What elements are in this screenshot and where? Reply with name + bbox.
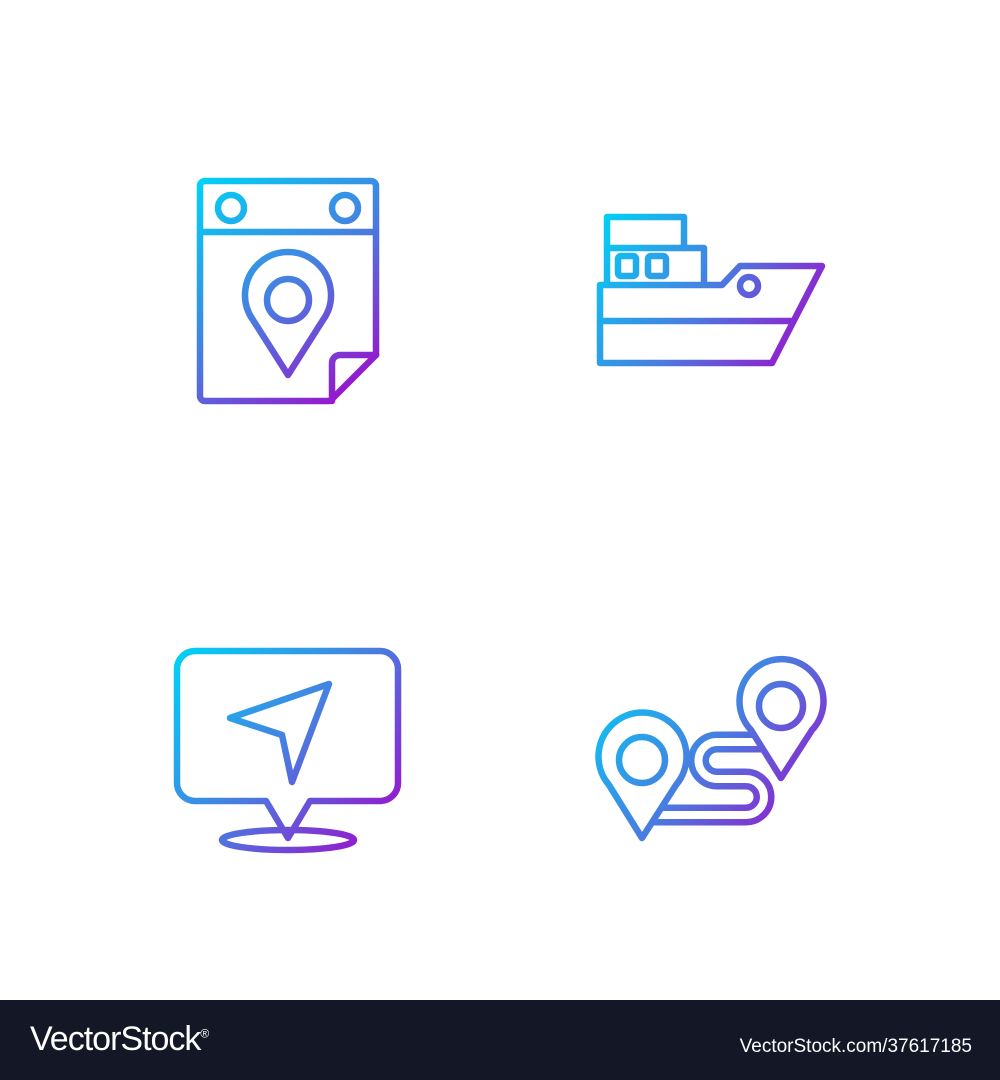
icon: ship bbox=[600, 217, 822, 363]
watermark bar bbox=[0, 1000, 1000, 1080]
logo text: VectorStock® bbox=[30, 1020, 208, 1058]
icon: speech bubble with navigation arrow bbox=[177, 651, 398, 850]
url text: VectorStock.com/37617185 bbox=[740, 1036, 972, 1057]
icon: route between two pins bbox=[599, 659, 824, 838]
icon: calendar with location pin bbox=[200, 181, 376, 401]
